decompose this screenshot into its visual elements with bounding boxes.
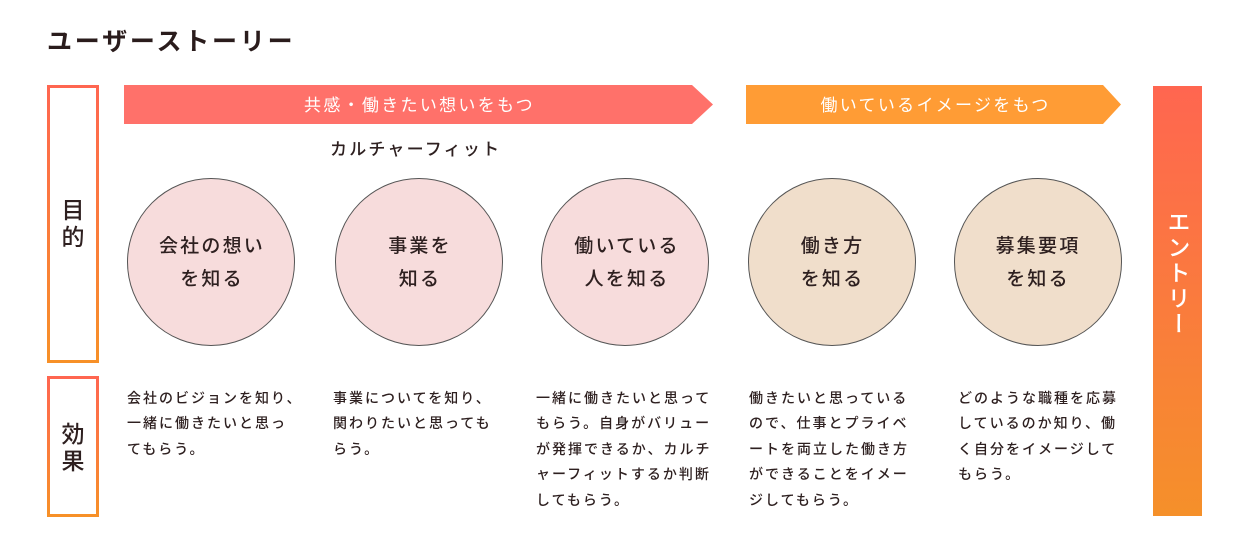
text: work style effect: ートを両立した働き方 xyxy=(749,440,909,456)
text: work style effect: ので、仕事とプライベ xyxy=(749,415,908,431)
text: business effect: 関わりたいと思っても xyxy=(333,415,492,431)
text: job requirements effect xyxy=(958,390,1118,482)
circle: company: を知る xyxy=(180,268,244,290)
text: company effect: 一緒に働きたいと思っ xyxy=(127,415,287,431)
circle: people: 働いている xyxy=(574,236,680,256)
button: entry xyxy=(1153,86,1202,516)
circle: business xyxy=(334,178,502,346)
label: effect: 効 xyxy=(62,421,84,447)
text: people effect: もらう。自身がバリュー xyxy=(536,415,711,431)
label: purpose xyxy=(62,197,84,250)
circle: people xyxy=(541,178,709,346)
arrow: working image banner xyxy=(746,85,1121,124)
text: people effect: が発揮できるか、カルチ xyxy=(536,440,711,456)
label: effect: 果 xyxy=(62,448,84,474)
heading: culture fit: カルチャーフィット xyxy=(330,140,501,159)
text: job requirements effect: もらう。 xyxy=(958,466,1021,482)
arrow: empathy banner: 共感・働きたい想いをもつ xyxy=(304,96,535,115)
label: entry: エントリー xyxy=(1164,210,1190,338)
text: company effect: 会社のビジョンを知り、 xyxy=(127,390,302,406)
arrow: working image banner: 働いているイメージをもつ xyxy=(820,96,1051,115)
label: purpose: 的 xyxy=(62,224,84,250)
circle: job requirements: を知る xyxy=(1006,268,1070,290)
text: business effect xyxy=(333,390,492,456)
text: people effect: 一緒に働きたいと思って xyxy=(536,390,711,406)
circle: job requirements xyxy=(954,178,1122,346)
text: people effect: してもらう。 xyxy=(536,492,630,508)
circle: work style xyxy=(748,178,916,346)
circle: company xyxy=(127,178,295,346)
label: purpose: 目 xyxy=(62,197,84,223)
text: job requirements effect: どのような職種を応募 xyxy=(958,390,1118,406)
text: people effect: ャーフィットするか判断 xyxy=(536,466,711,482)
panel: purpose label xyxy=(47,85,99,363)
circle: work style: 働き方 xyxy=(801,236,864,256)
arrow: empathy banner xyxy=(124,85,713,124)
text: company effect: てもらう。 xyxy=(127,440,205,456)
circle: job requirements: 募集要項 xyxy=(996,236,1080,256)
text: work style effect: ジしてもらう。 xyxy=(749,492,859,508)
text: job requirements effect: しているのか知り、働 xyxy=(958,415,1117,431)
circle: work style: を知る xyxy=(801,268,864,290)
text: business effect: 事業についてを知り、 xyxy=(333,390,492,406)
circle: business: 事業を xyxy=(388,236,452,256)
circle: business: 知る xyxy=(399,268,441,290)
text: work style effect: 働きたいと思っている xyxy=(749,390,908,406)
title: ユーザーストーリー xyxy=(47,28,295,56)
circle: people: 人を知る xyxy=(585,268,669,290)
text: work style effect xyxy=(749,390,909,508)
label: effect xyxy=(62,421,84,474)
panel: effect label xyxy=(47,376,99,517)
circle: company: 会社の想い xyxy=(159,236,265,256)
text: company effect xyxy=(127,390,302,456)
text: work style effect: ができることをイメー xyxy=(749,466,909,482)
text: people effect xyxy=(536,390,711,508)
text: business effect: らう。 xyxy=(333,440,380,456)
text: job requirements effect: く自分をイメージして xyxy=(958,440,1117,456)
